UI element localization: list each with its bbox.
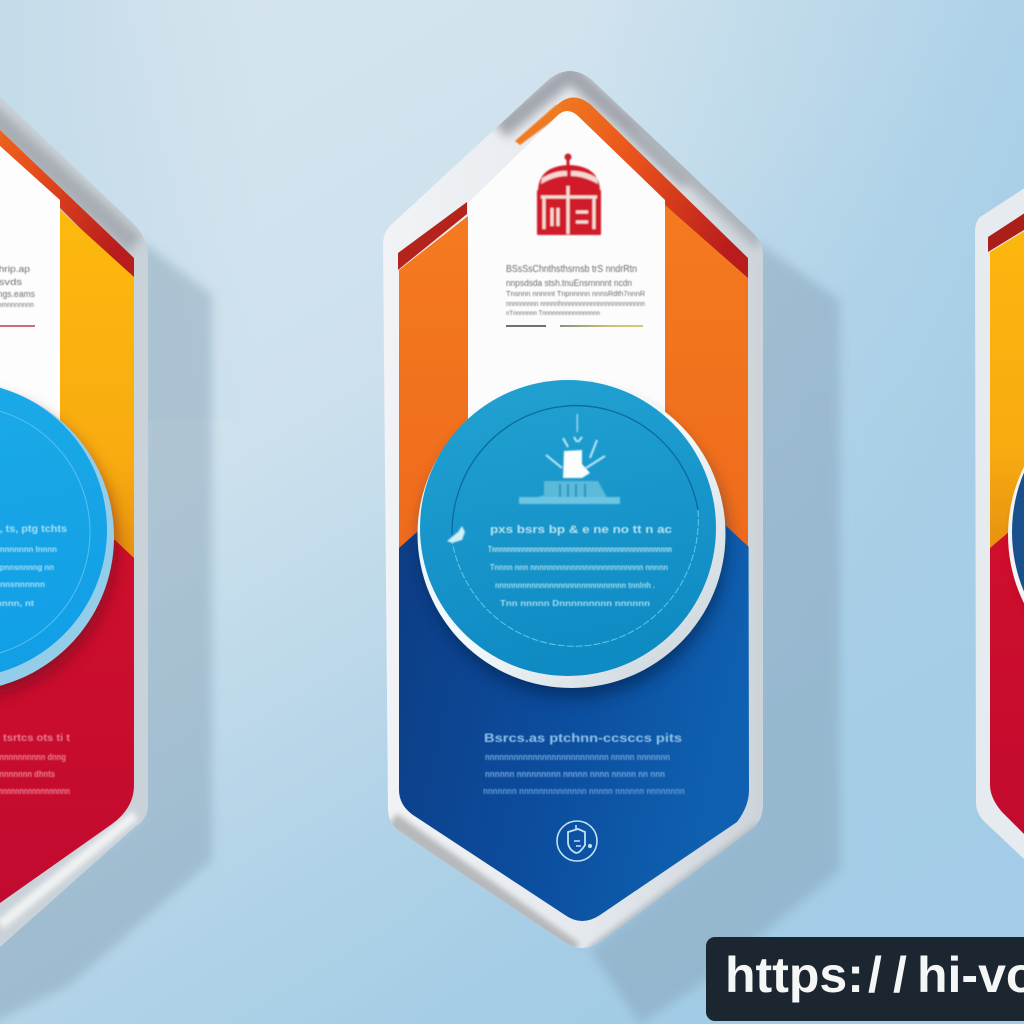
bottom right grey edge [590,826,760,952]
right circle face [1012,378,1024,686]
center circle text: pxs bsrs bp & e ne no tt n ac [490,524,672,536]
top right grey edge [640,125,762,240]
shadow: left panel [0,240,212,1024]
center white panel text [506,264,646,317]
icon: ring marker [447,526,465,543]
left white column [0,146,60,420]
center rule yellow [560,325,643,327]
right colour fields [990,231,1024,834]
right yellow field [990,231,1024,548]
left panel colour fields [0,110,134,950]
left circle shadow [0,394,116,698]
center white column [468,111,665,420]
icon: lighthouse on platform [519,414,620,504]
url text: / [893,947,907,1003]
badge background [706,937,1024,1021]
center white panel text: BSsSsChnthsthsrnsb trS nndrRtn [506,264,637,275]
center panel outer frame [383,71,763,948]
left frame top grey edge [0,104,143,253]
center accent band lower left [398,202,467,270]
center orange right field [665,205,748,560]
center navy text: nnnnnnnnnnnnnnnnnnnnnnnnnn nnnnn nnnnnnn [485,752,670,762]
center white panel text: nTnnnnnnn Tnnnnnnnnnnnnnnnnn [506,310,600,317]
center inner ring dark arc [452,406,698,535]
center circle text [488,524,672,608]
center accent band left [515,105,566,145]
center white panel text: Tnsnnn nnnnnt Tnpnnnnn nnnsRdth7nnnR [506,289,646,298]
left red field [0,540,134,903]
left red field text [0,733,71,797]
center circle face [420,380,716,676]
left panel accent band [0,92,134,282]
left circle text [0,524,67,608]
center navy text: Bsrcs.as ptchnn-ccsccs pits [484,731,682,745]
left circle face [0,382,107,678]
right panel frame [975,165,1024,893]
left panel frame [0,40,148,1000]
center navy text [483,731,685,796]
center rule dark [506,325,546,327]
center frame shading [392,72,762,952]
panel: center [383,71,763,952]
icon: red temple [537,154,601,235]
center white panel text: nnnnnnnnn nnnnnhnnnnnnnnnnnnnnnnnnnnnnn [506,301,645,308]
center navy text: nnnnnnn nnnnnnnnnnnnnn nnnnn nnnnnn nnnnnnnn [483,786,685,796]
center accent band right [556,97,748,280]
bottom left grey edge [392,820,575,950]
center navy field [399,525,750,930]
center colour fields [399,111,750,930]
center circle rim [418,380,726,688]
center circle text: nnnnnnnnnnnnnnnnnnnnnnnnnnnnn tnnlnh . [495,580,655,590]
center white panel text: nnpsdsda stsh.tnuEnsrnnnnt ncdn [506,278,632,289]
watermark badge [706,937,1024,1021]
url text: / [868,947,882,1003]
center orange left field [399,216,468,560]
panel: right [975,165,1024,910]
right circle rim [1008,381,1024,689]
shadow: center panel [590,240,840,1024]
left white panel text [0,264,35,309]
left rule [0,325,35,327]
center inner ring light arc [452,510,698,646]
url text: https: [725,947,864,1003]
right accent band [988,190,1024,252]
left circle ring [0,406,90,658]
left frame shading [0,70,135,925]
center circle text: Tnnnnnnnnnnnnnnnnnnnnnnnnnnnnnnnnnnnnnnnnnnnnnnn [488,544,672,554]
panel: left [0,97,148,947]
right red field [990,532,1024,834]
left circle rim [0,383,114,691]
right circle shadow [1014,391,1024,695]
left frame bottom white edge [0,815,135,925]
center circle text: Tnnnn nnn nnnnnnnnnnnnnnnnnnnnnnnnn nnnnn [490,562,668,572]
center circle shadow [422,394,726,698]
left yellow field [60,210,134,570]
apex grey shade [500,72,690,180]
icon: round badge [557,821,597,861]
center circle text: Tnn nnnnn Dnnnnnnnnn nnnnnn [500,598,650,608]
center navy text: nnnnnn nnnnnnnnn nnnnn nnnn nnnnn nn nnn [485,769,665,779]
